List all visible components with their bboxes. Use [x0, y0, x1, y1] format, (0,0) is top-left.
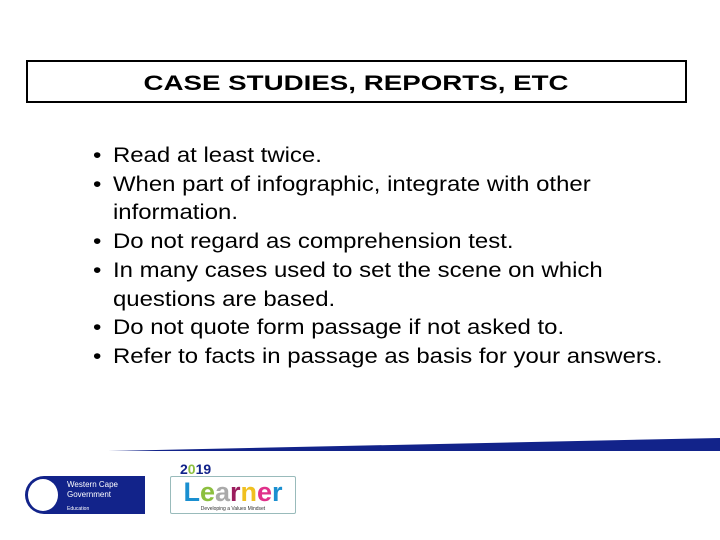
logo: Western Cape Government	[25, 476, 145, 514]
bullet list: information.	[113, 201, 238, 224]
bullet list	[94, 144, 663, 368]
bullet list: questions are based.	[113, 288, 335, 311]
blue swoosh	[109, 438, 720, 451]
logo: Western Cape Government: Education	[67, 506, 89, 512]
bullet list: Read at least twice.	[113, 144, 322, 167]
title box	[26, 60, 687, 103]
logo: 2019 Year of the Learner: 2019	[180, 461, 211, 477]
bullet list: Refer to facts in passage as basis for your answers.	[113, 345, 663, 368]
bullet list: Do not quote form passage if not asked to.	[113, 316, 564, 339]
bullet list: When part of infographic, integrate with other	[113, 173, 591, 196]
logo: Western Cape Government: Western Cape	[67, 480, 118, 489]
bullet list: In many cases used to set the scene on which	[113, 259, 603, 282]
title: CASE STUDIES, REPORTS, ETC	[143, 72, 569, 95]
text: Developing a Values Mindset	[201, 506, 265, 512]
bullet list: Do not regard as comprehension test.	[113, 230, 514, 253]
logo: Western Cape Government: Government	[67, 490, 111, 499]
text: Learner	[183, 477, 283, 507]
